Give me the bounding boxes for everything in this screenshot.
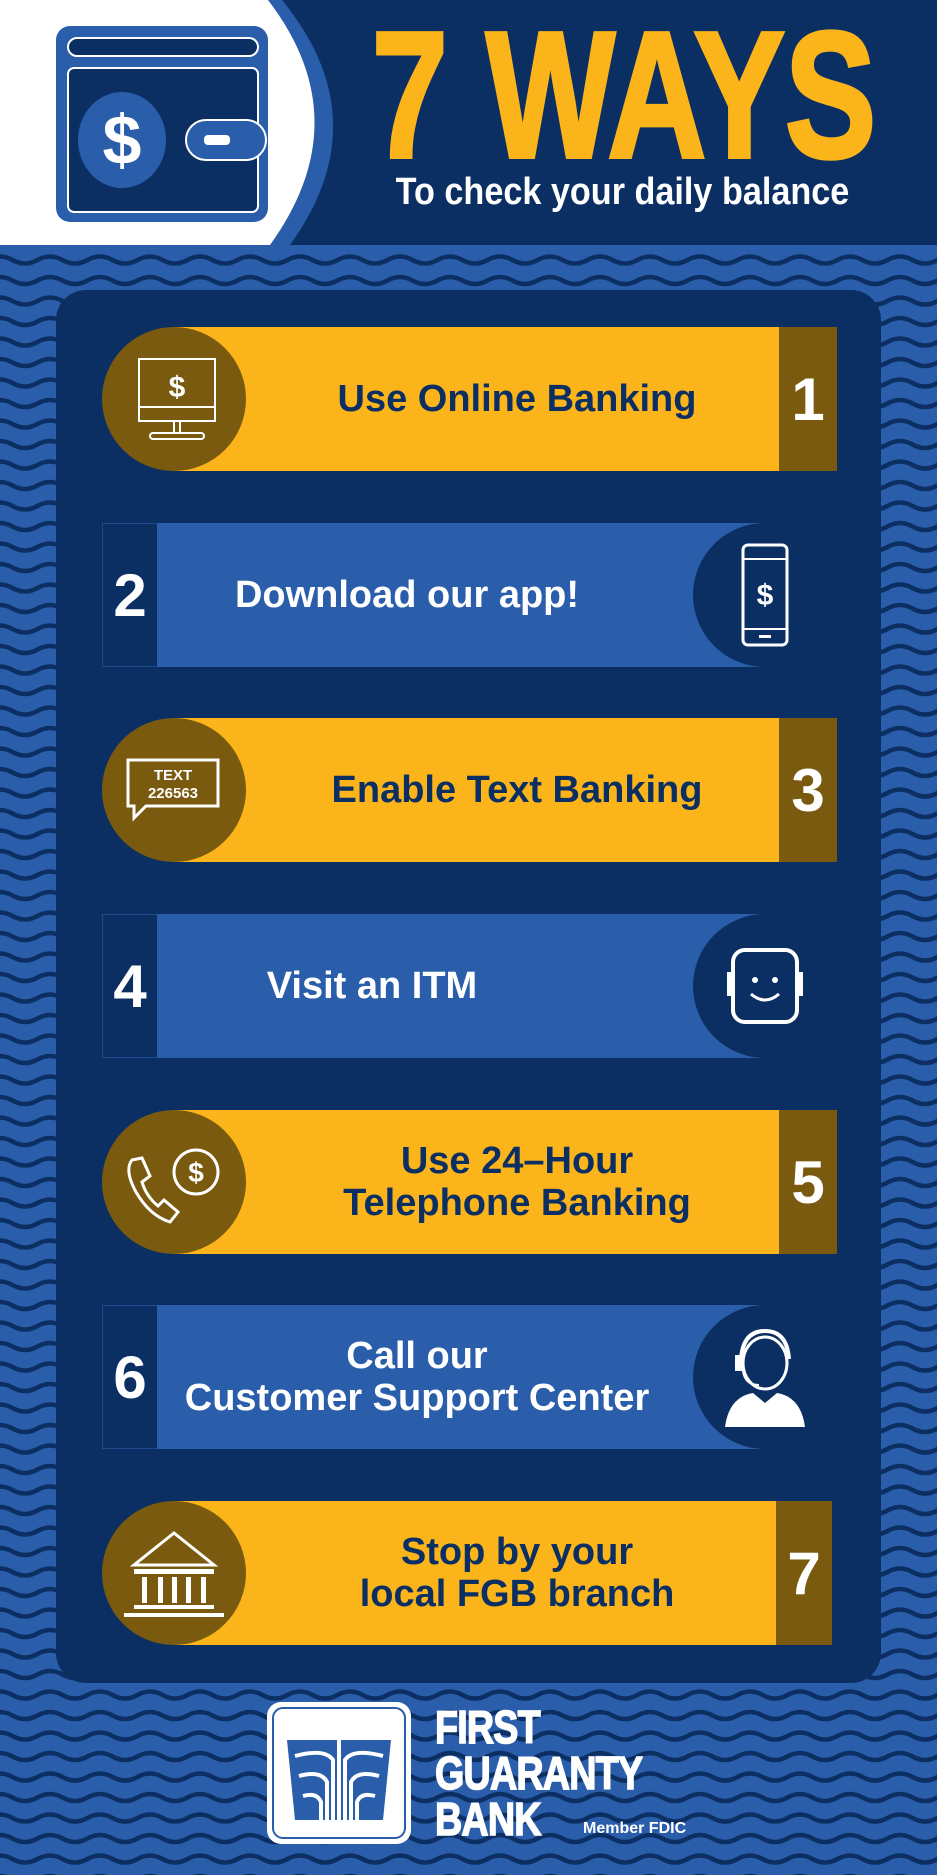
icon: headset person (725, 1329, 805, 1427)
row 2: 2 (113, 562, 147, 628)
row 5 (102, 1110, 837, 1254)
icon: monitor: $ (169, 371, 186, 404)
icon: telephone dollar: $ (188, 1157, 204, 1188)
icon: text bubble: 226563 (148, 785, 198, 802)
row 1: 1 (791, 366, 825, 432)
row 6: Customer Support Center (185, 1377, 649, 1419)
icon: ITM face (727, 948, 803, 1024)
panel: list (56, 290, 881, 1683)
row 3: Enable Text Banking (332, 769, 702, 811)
icon: monitor (138, 358, 216, 440)
row 6: Call our (346, 1335, 488, 1377)
row 7: local FGB branch (360, 1573, 674, 1615)
row 6: 6 (113, 1344, 147, 1410)
subtitle: To check your daily balance (396, 171, 849, 213)
icon: wallet: $ (103, 101, 141, 179)
text: bank name: FIRST (435, 1701, 540, 1753)
row 2: Download our app! (235, 574, 579, 616)
text: bank name: GUARANTY (435, 1747, 642, 1799)
icon: telephone dollar (127, 1148, 220, 1224)
icon: text bubble: TEXT (154, 767, 192, 784)
icon: wallet (56, 26, 268, 222)
title: 7 WAYS (372, 0, 876, 196)
row 7: 7 (787, 1540, 821, 1606)
icon: bank building (124, 1531, 224, 1617)
row 4: 4 (113, 952, 147, 1020)
text: member FDIC: Member FDIC (583, 1820, 686, 1837)
text: bank name (435, 1701, 644, 1845)
row 3: 3 (791, 756, 825, 824)
text: bank name: BANK (435, 1793, 541, 1845)
logo (267, 1701, 686, 1845)
row 6 (102, 1305, 805, 1449)
row 5: Telephone Banking (343, 1182, 691, 1224)
icon: phone (742, 544, 788, 646)
header (0, 0, 937, 245)
icon: text bubble (126, 758, 220, 822)
row 4: Visit an ITM (267, 965, 477, 1007)
row 5: Use 24–Hour (401, 1140, 633, 1182)
icon: bank emblem (267, 1702, 411, 1844)
row 2 (102, 523, 788, 667)
row 7 (102, 1501, 832, 1645)
row 7: Stop by your (401, 1531, 633, 1573)
icon: phone: $ (757, 579, 774, 612)
row 4 (102, 914, 803, 1058)
row 1: Use Online Banking (338, 378, 696, 420)
row 5: 5 (791, 1148, 825, 1216)
row 1 (102, 327, 837, 471)
row 3 (102, 718, 837, 862)
